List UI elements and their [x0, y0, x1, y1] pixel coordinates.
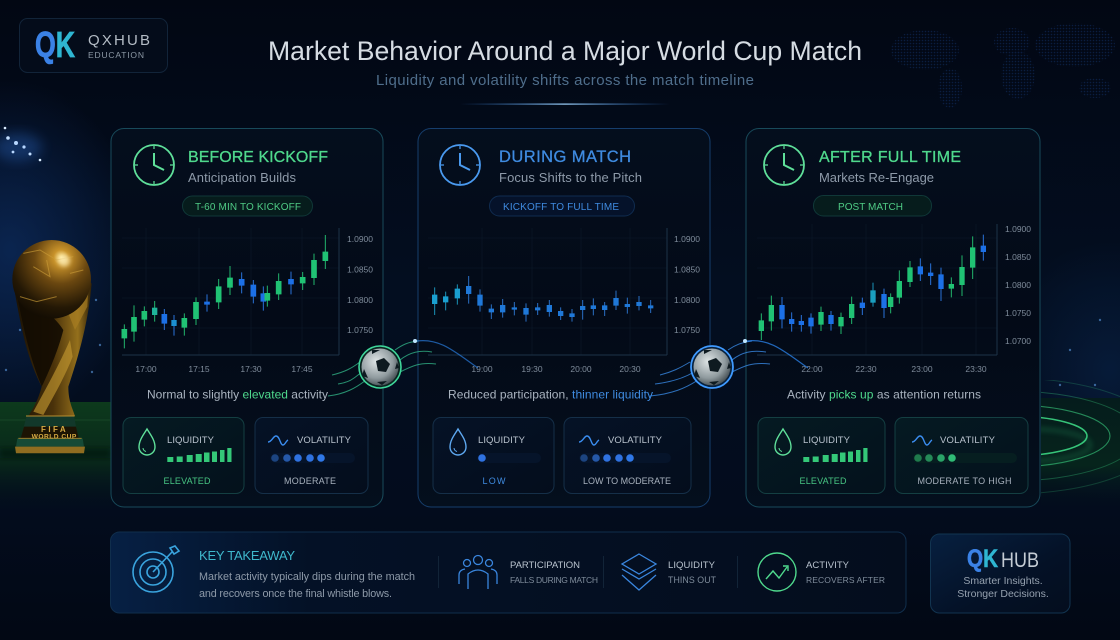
- time axis labels: 22:00: [801, 364, 823, 374]
- world map dots: [891, 23, 1115, 108]
- time window pill: [814, 196, 932, 216]
- icon: people: [459, 556, 497, 589]
- card: liquidity: [433, 418, 554, 494]
- time axis labels: 20:00: [570, 364, 592, 374]
- card: liquidity: ELEVATED: [800, 476, 847, 486]
- card: volatility: LOW TO MODERATE: [583, 476, 671, 486]
- subheading: Markets Re-Engage: [819, 170, 934, 185]
- tagline: [957, 575, 1049, 600]
- brand badge: QXHUB Education: [20, 18, 168, 72]
- subheading: Anticipation Builds: [188, 170, 296, 185]
- icon: water drop: [775, 429, 791, 455]
- volatility dots: [579, 453, 671, 463]
- stat: liquidity: LIQUIDITY: [668, 560, 716, 571]
- takeaway heading: KEY TAKEAWAY: [199, 548, 295, 563]
- icon: clock: [440, 145, 480, 185]
- panel: before kickoff: [111, 128, 383, 507]
- time window pill: KICKOFF TO FULL TIME: [503, 202, 619, 213]
- card: volatility: VOLATILITY: [608, 435, 663, 446]
- description: Normal to slightly elevated activity: [147, 388, 328, 402]
- icon: clock: [134, 145, 174, 185]
- time window pill: [182, 196, 312, 216]
- card: liquidity: [758, 418, 885, 494]
- time axis labels: 17:15: [188, 364, 210, 374]
- card: volatility: MODERATE: [284, 476, 336, 486]
- time axis labels: [801, 364, 987, 374]
- icon: activity trend: [758, 553, 796, 591]
- liquidity level bars: [803, 448, 868, 462]
- soccer ball transition: during to after: [650, 339, 808, 396]
- volatility dots: [913, 453, 1017, 463]
- panel: after full time: [746, 128, 1040, 507]
- trophy base: [21, 416, 78, 438]
- takeaway text: Market activity typically dips during the match: [199, 571, 415, 583]
- panel: during match: [418, 128, 710, 507]
- price axis labels: 1.0800: [674, 295, 700, 305]
- brand name: QXHUB: [88, 32, 150, 49]
- card: liquidity: LOW: [482, 476, 506, 486]
- liquidity level bar: [477, 453, 541, 463]
- price axis labels: [1005, 224, 1031, 346]
- stat: participation: FALLS DURING MATCH: [510, 575, 598, 585]
- trophy body: [15, 280, 92, 416]
- candlestick chart: [122, 228, 373, 374]
- logo word: HUB: [1001, 549, 1039, 572]
- card: volatility: MODERATE TO HIGH: [918, 476, 1012, 486]
- time axis labels: 23:00: [911, 364, 933, 374]
- motion swirls: [328, 341, 436, 396]
- time axis labels: 17:00: [135, 364, 157, 374]
- price axis labels: 1.0700: [1005, 336, 1031, 346]
- takeaway text: [199, 571, 415, 600]
- ball: [359, 346, 401, 388]
- soccer ball transition: before to during: [328, 339, 478, 396]
- icon: water drop: [139, 429, 155, 455]
- heading: BEFORE KICKOFF: [188, 149, 328, 166]
- trophy: [0, 240, 110, 458]
- volatility dots: [270, 453, 355, 463]
- motion swirls: [650, 341, 770, 396]
- card: volatility: [895, 418, 1028, 494]
- time axis labels: [471, 364, 641, 374]
- price axis labels: 1.0850: [347, 264, 373, 274]
- ball: [691, 346, 733, 388]
- time axis labels: 17:30: [240, 364, 262, 374]
- stat: activity: ACTIVITY: [806, 560, 850, 571]
- icon: water drop: [450, 429, 466, 455]
- price axis labels: 1.0750: [1005, 308, 1031, 318]
- stat: activity: RECOVERS AFTER: [806, 575, 885, 585]
- time axis labels: [135, 364, 313, 374]
- brand descriptor: EDUCATION: [88, 50, 144, 60]
- heading: AFTER FULL TIME: [819, 149, 961, 166]
- panel: key takeaway strip: [110, 532, 906, 613]
- time window pill: T-60 MIN TO KICKOFF: [195, 202, 301, 213]
- icon: layers: [622, 554, 656, 590]
- card: volatility: [564, 418, 691, 494]
- liquidity level bars: [167, 448, 232, 462]
- tagline: Stronger Decisions.: [957, 588, 1049, 600]
- stat: liquidity: [668, 560, 717, 585]
- price axis labels: 1.0750: [347, 325, 373, 335]
- price axis labels: 1.0750: [674, 325, 700, 335]
- time axis labels: 23:30: [965, 364, 987, 374]
- panel: brand tagline: [930, 534, 1070, 613]
- card: liquidity: ELEVATED: [164, 476, 211, 486]
- description: Reduced participation, thinner liquidity: [448, 388, 653, 402]
- takeaway text: and recovers once the final whistle blows.: [199, 588, 392, 600]
- time axis labels: 19:00: [471, 364, 493, 374]
- green ripple rings on the pitch: [1041, 380, 1120, 494]
- card: liquidity: [123, 418, 244, 494]
- icon: clock: [764, 145, 804, 185]
- price axis labels: 1.0800: [1005, 280, 1031, 290]
- trophy inscription: FIFA: [41, 425, 66, 434]
- card: liquidity: LIQUIDITY: [478, 435, 526, 446]
- subtitle: Liquidity and volatility shifts across the match timeline: [376, 72, 754, 89]
- time axis labels: 22:30: [855, 364, 877, 374]
- price axis labels: 1.0850: [674, 264, 700, 274]
- candlestick chart: [428, 228, 700, 374]
- stat: activity: [806, 560, 885, 585]
- time axis labels: 20:30: [619, 364, 641, 374]
- icon: wave: [268, 436, 288, 445]
- logo mark: QK: [35, 24, 75, 65]
- trophy inscription: [32, 425, 77, 441]
- price axis labels: 1.0800: [347, 295, 373, 305]
- card: volatility: VOLATILITY: [940, 435, 996, 446]
- price axis labels: 1.0900: [674, 234, 700, 244]
- subheading: Focus Shifts to the Pitch: [499, 170, 642, 185]
- stat: participation: PARTICIPATION: [510, 560, 580, 571]
- icon: wave: [579, 436, 599, 445]
- icon: target: [133, 546, 179, 592]
- candlestick chart: [757, 224, 1031, 374]
- card: liquidity: LIQUIDITY: [167, 435, 215, 446]
- heading: DURING MATCH: [499, 148, 631, 166]
- description: Activity picks up as attention returns: [787, 388, 981, 402]
- price axis labels: [347, 234, 373, 335]
- price axis labels: [674, 234, 700, 335]
- time window pill: POST MATCH: [838, 202, 903, 213]
- stat: liquidity: THINS OUT: [668, 575, 717, 585]
- card: volatility: [255, 418, 368, 494]
- tagline: Smarter Insights.: [963, 575, 1043, 587]
- price axis labels: 1.0850: [1005, 252, 1031, 262]
- trophy globe: [12, 240, 91, 319]
- time axis labels: 17:45: [291, 364, 313, 374]
- title: Market Behavior Around a Major World Cup Match: [268, 36, 862, 66]
- card: liquidity: LIQUIDITY: [803, 435, 851, 446]
- card: volatility: VOLATILITY: [297, 435, 352, 446]
- trophy inscription: WORLD CUP: [32, 434, 77, 441]
- time window pill: [490, 196, 634, 216]
- price axis labels: 1.0900: [1005, 224, 1031, 234]
- time axis labels: 19:30: [521, 364, 543, 374]
- icon: wave: [912, 436, 932, 445]
- stat: participation: [510, 560, 598, 585]
- logo mark: QK: [967, 545, 998, 573]
- price axis labels: 1.0900: [347, 234, 373, 244]
